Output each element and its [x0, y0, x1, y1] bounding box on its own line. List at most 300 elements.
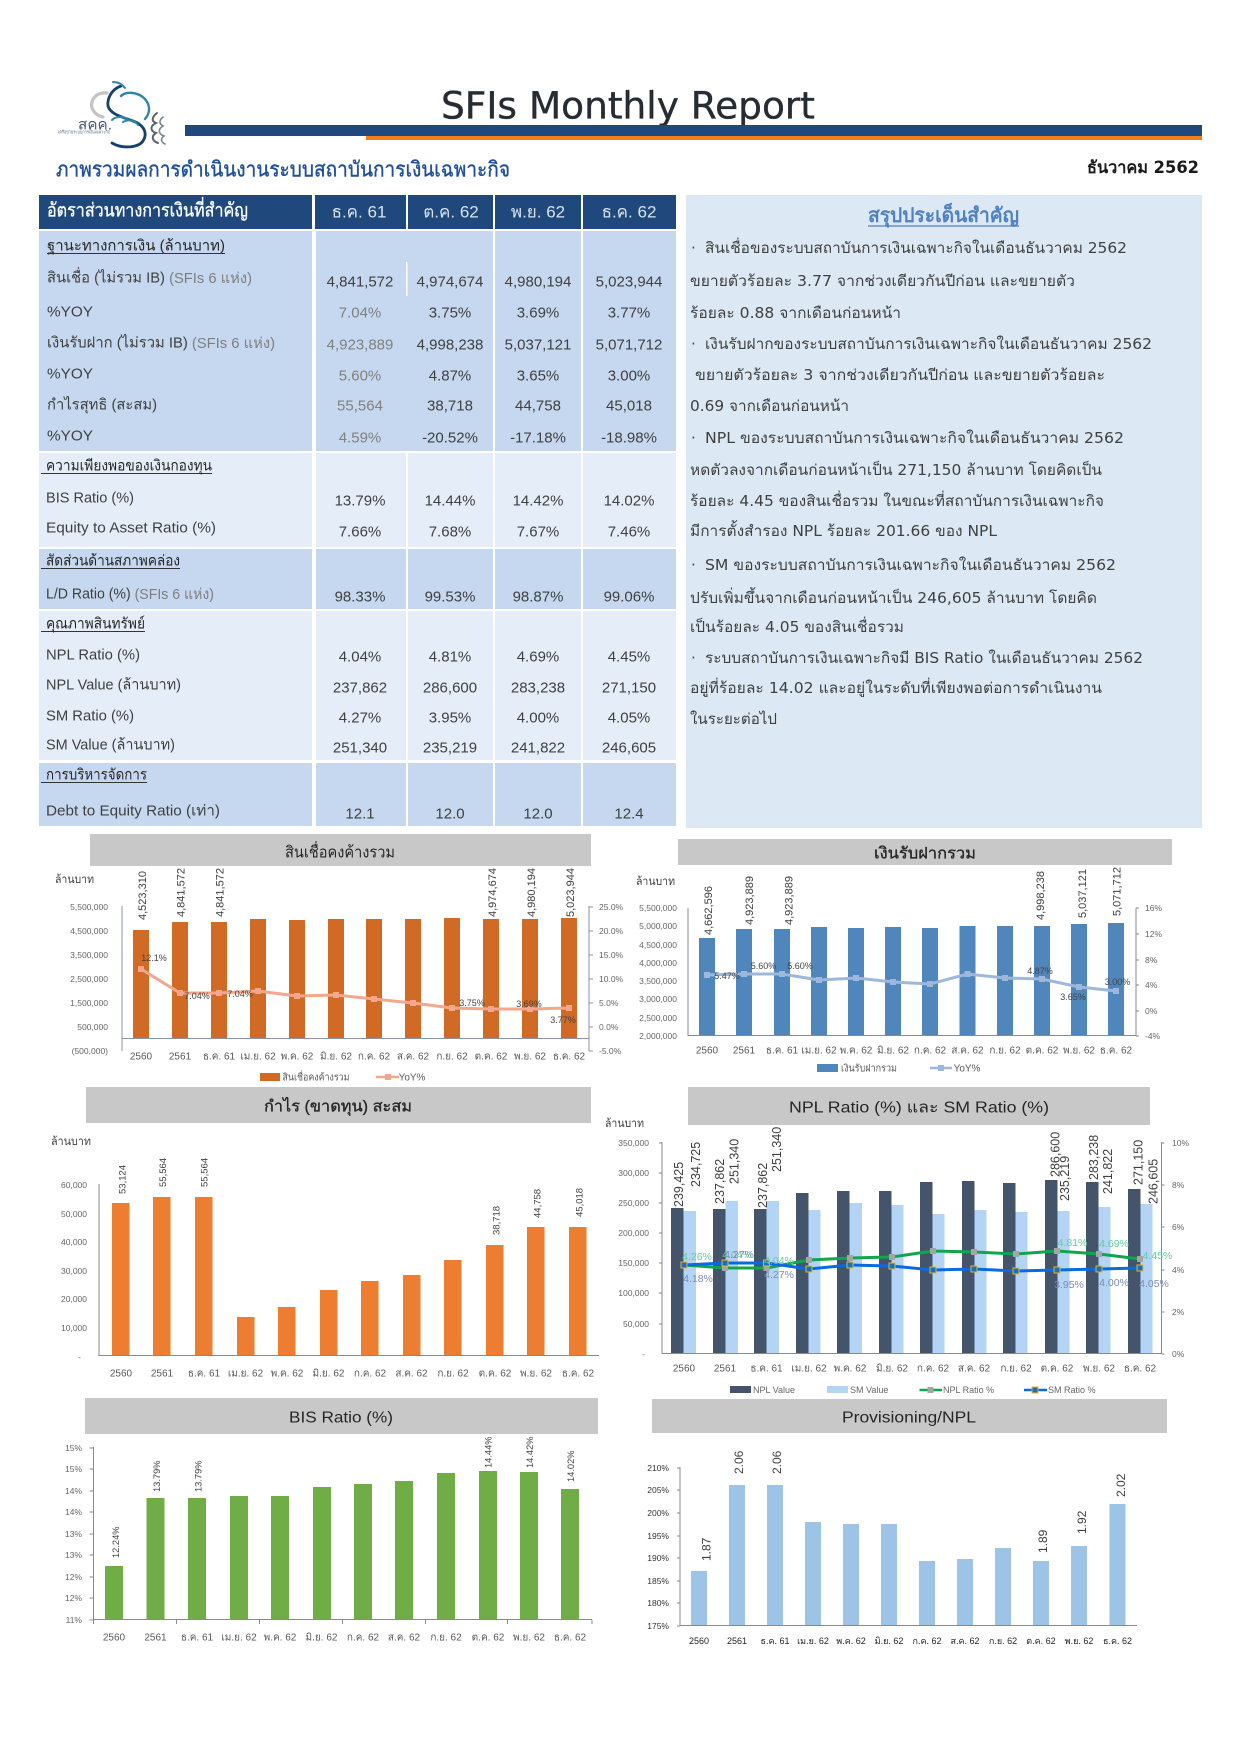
- summary text: อยู่ที่ร้อยละ 14.02 และอยู่ในระดับที่เพียงพอต่อการดำเนินงาน: [690, 677, 1102, 697]
- table section: financial position: 38,718: [427, 398, 473, 414]
- table section: asset quality: NPL Value (ล้านบาท): [46, 676, 181, 694]
- x axis labels: พ.ย. 62: [513, 1632, 545, 1644]
- table header row: ต.ค. 62: [423, 202, 479, 222]
- x axis labels: ธ.ค. 62: [554, 1632, 587, 1644]
- table section: capital adequacy: 7.68%: [429, 524, 471, 540]
- x axis labels: ธ.ค. 62: [562, 1368, 595, 1380]
- panel: outstanding loans chart: สินเชื่อคงค้างรวม: [285, 840, 395, 862]
- rotated value labels: 53,124: [118, 1165, 128, 1194]
- panel: accumulated profit chart: ล้านบาท: [51, 1135, 91, 1148]
- icon: SFIs logo: สคค.: [78, 116, 112, 134]
- x axis labels: เม.ย. 62: [228, 1368, 264, 1380]
- table section: financial position: 3.00%: [608, 368, 650, 384]
- rotated value labels: 5,071,712: [1112, 867, 1124, 916]
- table section: asset quality: 4.81%: [429, 648, 471, 666]
- axes: 0%: [1145, 1006, 1158, 1016]
- panel: BIS ratio chart: BIS Ratio (%): [289, 1410, 393, 1426]
- panel: NPL and SM ratio chart: NPL Ratio (%) และ SM Ratio (%): [789, 1100, 1049, 1116]
- axes: 16%: [1145, 903, 1162, 913]
- axes: 12%: [1145, 929, 1162, 939]
- x axis labels: พ.ค. 62: [840, 1046, 873, 1056]
- line: YoY: 7.04%: [184, 991, 210, 1001]
- rotated value labels: 4,980,194: [526, 868, 538, 917]
- table section: liquidity: 99.53%: [425, 588, 475, 606]
- rotated value labels: 237,862: [756, 1163, 770, 1208]
- x axis labels: ก.ย. 62: [430, 1632, 462, 1644]
- table header row: พ.ย. 62: [511, 202, 565, 222]
- axes: 5.0%: [599, 998, 619, 1008]
- axes: 4,500,000: [70, 926, 108, 936]
- table section: capital adequacy: [39, 453, 676, 547]
- rotated value labels: 271,150: [1132, 1140, 1146, 1185]
- report date: ธันวาคม 2562: [1087, 158, 1199, 178]
- summary text: ระบบสถาบันการเงินเฉพาะกิจมี BIS Ratio ในเดือนธันวาคม 2562: [705, 649, 1143, 667]
- summary text: เป็นร้อยละ 4.05 ของสินเชื่อรวม: [690, 616, 904, 636]
- rotated value labels: 2.06: [770, 1450, 784, 1474]
- rotated value labels: 4,923,889: [744, 876, 756, 925]
- axes: -: [642, 1349, 645, 1359]
- rotated value labels: 239,425: [672, 1162, 686, 1207]
- axes: 50,000: [623, 1319, 649, 1329]
- axes: 15%: [65, 1464, 82, 1474]
- x axis labels: 2561: [144, 1632, 167, 1644]
- rotated value labels: 4,974,674: [487, 868, 499, 917]
- table section: financial position: เงินรับฝาก (ไม่รวม IB) (SFIs 6 แห่ง): [47, 334, 275, 352]
- line: YoY: 5.60%: [787, 961, 813, 971]
- panel: provisioning to NPL chart: Provisioning/NPL: [842, 1410, 976, 1426]
- ratio data labels: 4.27%: [764, 1269, 794, 1281]
- table section: financial position: 5.60%: [339, 368, 381, 384]
- table section: financial position: กำไรสุทธิ (สะสม): [47, 396, 157, 414]
- rotated value labels: 234,725: [689, 1142, 703, 1187]
- x axis labels: ต.ค. 62: [475, 1052, 508, 1062]
- x axis labels: ธ.ค. 61: [750, 1364, 783, 1374]
- table section: asset quality: [39, 611, 676, 760]
- axes: 10.0%: [599, 974, 624, 984]
- x axis labels: ธ.ค. 62: [1100, 1046, 1133, 1056]
- x axis labels: พ.ย. 62: [520, 1368, 552, 1380]
- bars: NPL value: [671, 1180, 1140, 1353]
- line: YoY: 3.75%: [459, 998, 485, 1008]
- summary text: ·: [691, 429, 696, 447]
- table section: asset quality: 4.45%: [608, 648, 650, 666]
- table section: asset quality: 3.95%: [429, 710, 471, 726]
- legend: SM Ratio %: [1048, 1385, 1096, 1395]
- table section: liquidity: [39, 549, 676, 609]
- ratio data labels: 4.81%: [1058, 1237, 1087, 1249]
- rotated value labels: 251,340: [728, 1139, 742, 1184]
- axes: 13%: [65, 1529, 82, 1539]
- x axis labels: พ.ค. 62: [281, 1052, 314, 1062]
- table section: management: [39, 763, 676, 826]
- bars: deposits: [699, 923, 1124, 1035]
- panel: NPL and SM ratio chart: [605, 1087, 1189, 1395]
- x axis labels: ส.ค. 62: [395, 1368, 428, 1380]
- header bar: [185, 125, 1202, 140]
- x axis labels: เม.ย. 62: [221, 1632, 257, 1644]
- axes: [647, 1463, 1137, 1631]
- table section: financial position: 3.65%: [517, 368, 559, 384]
- x axis labels: มิ.ย. 62: [306, 1632, 338, 1644]
- axes: 350,000: [618, 1138, 649, 1148]
- panel: total deposits chart: ล้านบาท: [636, 875, 675, 888]
- x axis labels: มิ.ย. 62: [877, 1046, 909, 1056]
- table section: financial position: -17.18%: [510, 430, 566, 446]
- x axis labels: [696, 1046, 1133, 1056]
- legend: YoY%: [399, 1072, 426, 1084]
- table section: financial position: สินเชื่อ (ไม่รวม IB) (SFIs 6 แห่ง): [47, 266, 252, 286]
- rotated value labels: 13.79%: [194, 1460, 204, 1492]
- x axis labels: พ.ย. 62: [1063, 1046, 1095, 1056]
- x axis labels: ต.ค. 62: [1026, 1046, 1059, 1056]
- line: YoY: 3.69%: [516, 999, 542, 1009]
- axes: 14%: [65, 1507, 82, 1517]
- table section: management: 12.4: [614, 806, 644, 822]
- x axis labels: ธ.ค. 62: [1124, 1364, 1157, 1374]
- x axis labels: ส.ค. 62: [950, 1636, 980, 1646]
- axes: 25.0%: [599, 902, 624, 912]
- table section: financial position: -20.52%: [422, 430, 478, 446]
- axes: 500,000: [77, 1022, 108, 1032]
- axes: 20,000: [61, 1294, 87, 1304]
- axes: 2%: [1172, 1307, 1185, 1317]
- x axis labels: ต.ค. 62: [472, 1632, 505, 1644]
- rotated value labels: 4,523,310: [137, 871, 149, 920]
- x axis labels: เม.ย. 62: [801, 1046, 837, 1056]
- panel: outstanding loans chart: [55, 834, 624, 1084]
- axes: 5,000,000: [639, 921, 677, 931]
- table section: financial position: 4,974,674: [417, 274, 483, 290]
- table header row: อัตราส่วนทางการเงินที่สำคัญ: [47, 196, 248, 222]
- x axis labels: พ.ค. 62: [264, 1632, 297, 1644]
- table section: capital adequacy: 7.66%: [339, 524, 381, 540]
- bars: provisioning: [691, 1485, 1126, 1625]
- axes: 2,500,000: [639, 1013, 677, 1023]
- legend: YoY%: [954, 1064, 981, 1074]
- rotated value labels: [703, 867, 1124, 935]
- x axis labels: ก.ค. 62: [913, 1636, 941, 1646]
- x axis labels: ส.ค. 62: [388, 1632, 421, 1644]
- summary text: หดตัวลงจากเดือนก่อนหน้าเป็น 271,150 ล้านบาท โดยคิดเป็น: [690, 460, 1102, 479]
- axes: 12%: [65, 1572, 82, 1582]
- rotated value labels: 55,564: [200, 1158, 210, 1187]
- axes: 250,000: [618, 1198, 649, 1208]
- ratio data labels: 4.00%: [1099, 1277, 1129, 1289]
- table section: financial position: 5,037,121: [505, 336, 571, 354]
- table section: asset quality: 286,600: [423, 680, 477, 696]
- rotated value labels: 14.44%: [484, 1436, 494, 1468]
- x axis labels: พ.ค. 62: [271, 1368, 304, 1380]
- x axis labels: ธ.ค. 61: [766, 1046, 799, 1056]
- line: YoY: 5.47%: [714, 971, 740, 981]
- summary text: [690, 237, 1152, 728]
- line: YoY: [704, 961, 1130, 1002]
- x axis labels: ธ.ค. 62: [553, 1052, 586, 1062]
- x axis labels: 2560: [673, 1364, 696, 1374]
- x axis labels: 2560: [689, 1636, 709, 1646]
- rotated value labels: 237,862: [713, 1159, 727, 1204]
- x axis labels: ก.ย. 62: [436, 1052, 468, 1062]
- table section: financial position: 3.69%: [517, 304, 559, 322]
- x axis labels: เม.ย. 62: [240, 1052, 276, 1062]
- x axis labels: เม.ย. 62: [791, 1364, 827, 1374]
- table section: asset quality: 251,340: [333, 740, 387, 756]
- table section: financial position: 7.04%: [339, 304, 381, 322]
- ratio data labels: 4.18%: [683, 1273, 713, 1285]
- table section: asset quality: 4.00%: [517, 710, 559, 726]
- x axis labels: มิ.ย. 62: [313, 1368, 345, 1380]
- x axis labels: ต.ค. 62: [1041, 1364, 1074, 1374]
- table section: capital adequacy: Equity to Asset Ratio (%): [46, 520, 216, 536]
- table section: asset quality: 271,150: [602, 680, 656, 696]
- rotated value labels: 44,758: [532, 1189, 544, 1218]
- x axis labels: พ.ค. 62: [834, 1364, 867, 1374]
- table section: financial position: 5,071,712: [596, 336, 662, 354]
- summary text: ·: [691, 556, 696, 574]
- table section: capital adequacy: 7.67%: [517, 524, 559, 540]
- rotated value labels: 14.42%: [525, 1436, 535, 1468]
- panel: financial ratios table: [39, 195, 676, 826]
- icon: SFIs logo: เครือข่ายระบบการเงินเฉพาะกิจ: [58, 128, 110, 134]
- rotated value labels: 286,600: [1048, 1132, 1062, 1177]
- axes: 175%: [647, 1621, 669, 1631]
- table section: financial position: 55,564: [337, 398, 383, 414]
- panel: total deposits chart: เงินรับฝากรวม: [874, 846, 976, 862]
- rotated value labels: 2.06: [732, 1450, 746, 1474]
- ratio data labels: 4.04%: [764, 1255, 794, 1267]
- axes: [639, 903, 1162, 1041]
- axes: 185%: [647, 1576, 669, 1586]
- table header row: [39, 195, 676, 229]
- line: YoY: 12.1%: [141, 953, 167, 963]
- line: YoY: 3.00%: [1105, 977, 1130, 987]
- table section: financial position: 3.77%: [608, 304, 650, 322]
- rotated value labels: 4,841,572: [176, 868, 188, 917]
- x axis labels: ก.ค. 62: [358, 1052, 391, 1062]
- x axis labels: [110, 1368, 595, 1380]
- x axis labels: เม.ย. 62: [797, 1636, 829, 1646]
- table section: capital adequacy: 13.79%: [335, 492, 385, 510]
- table section: financial position: 44,758: [515, 398, 561, 414]
- table section: liquidity: สัดส่วนด้านสภาพคล่อง: [46, 552, 180, 570]
- rotated value labels: 45,018: [574, 1188, 586, 1217]
- legend: [817, 1064, 981, 1074]
- legend: [260, 1070, 426, 1084]
- axes: 12%: [65, 1593, 82, 1603]
- rotated value labels: 5,037,121: [1077, 869, 1089, 918]
- summary text: ·: [691, 239, 696, 257]
- x axis labels: 2560: [110, 1368, 133, 1380]
- x axis labels: พ.ย. 62: [514, 1052, 546, 1062]
- x axis labels: 2561: [714, 1364, 737, 1374]
- legend: สินเชื่อคงค้างรวม: [282, 1070, 350, 1084]
- table section: capital adequacy: 14.42%: [513, 492, 563, 510]
- table section: asset quality: 241,822: [511, 740, 565, 756]
- table section: asset quality: 237,862: [333, 680, 387, 696]
- line: YoY: 5.60%: [751, 961, 776, 971]
- table section: asset quality: 4.04%: [339, 648, 381, 666]
- axes: 0%: [1172, 1349, 1185, 1359]
- legend: เงินรับฝากรวม: [841, 1064, 897, 1074]
- table section: management: 12.1: [345, 806, 375, 822]
- ratio data labels: 4.04%: [722, 1249, 752, 1261]
- rotated value labels: 38,718: [492, 1206, 502, 1235]
- x axis labels: ส.ค. 62: [951, 1046, 984, 1056]
- legend: SM Value: [850, 1385, 888, 1395]
- x axis labels: มิ.ย. 62: [875, 1636, 903, 1646]
- axes: (500,000): [72, 1046, 108, 1056]
- line: YoY: 4.87%: [1027, 966, 1053, 976]
- table section: financial position: 4.87%: [429, 368, 471, 384]
- rotated value labels: 241,822: [1101, 1149, 1115, 1194]
- summary text: 0.69 จากเดือนก่อนหน้า: [690, 397, 849, 415]
- bars: loans: [133, 918, 577, 1038]
- rotated value labels: 1.92: [1075, 1510, 1089, 1534]
- x axis labels: 2560: [696, 1046, 719, 1056]
- axes: 8%: [1172, 1180, 1185, 1190]
- panel: accumulated profit chart: กำไร (ขาดทุน) สะสม: [264, 1096, 412, 1116]
- table section: management: 12.0: [435, 806, 465, 822]
- axes: 20.0%: [599, 926, 624, 936]
- line: YoY: 7.04%: [227, 989, 253, 999]
- x axis labels: ส.ค. 62: [958, 1364, 991, 1374]
- axes: 200,000: [618, 1228, 649, 1238]
- axes: [618, 1138, 1189, 1359]
- axes: 15%: [65, 1443, 82, 1453]
- axes: 4,500,000: [639, 940, 677, 950]
- summary text: SM ของระบบสถาบันการเงินเฉพาะกิจในเดือนธันวาคม 2562: [705, 556, 1116, 574]
- rotated value labels: 5,023,944: [565, 868, 577, 917]
- x axis labels: 2561: [151, 1368, 174, 1380]
- rotated value labels: [137, 868, 577, 920]
- axes: 1,500,000: [70, 998, 108, 1008]
- ratio data labels: 3.95%: [1054, 1279, 1084, 1291]
- legend: NPL Value: [753, 1385, 795, 1395]
- table section: financial position: 4,841,572: [327, 274, 393, 290]
- table section: liquidity: 99.06%: [604, 588, 654, 606]
- x axis labels: [689, 1636, 1132, 1646]
- table section: capital adequacy: ความเพียงพอของเงินกองทุน: [46, 458, 212, 476]
- table section: financial position: 4,998,238: [417, 336, 483, 354]
- table header row: ธ.ค. 61: [332, 202, 386, 222]
- bars: BIS: [105, 1471, 579, 1620]
- x axis labels: ก.ย. 62: [437, 1368, 469, 1380]
- axes: 50,000: [61, 1209, 87, 1219]
- subtitle: ภาพรวมผลการดำเนินงานระบบสถาบันการเงินเฉพาะกิจ: [56, 158, 510, 182]
- axes: 11%: [66, 1615, 82, 1625]
- x axis labels: ก.ค. 62: [347, 1632, 380, 1644]
- x axis labels: 2560: [103, 1632, 126, 1644]
- table section: asset quality: 283,238: [511, 680, 565, 696]
- x axis labels: ก.ย. 62: [1000, 1364, 1032, 1374]
- summary text: NPL ของระบบสถาบันการเงินเฉพาะกิจในเดือนธันวาคม 2562: [705, 429, 1124, 447]
- rotated value labels: 4,841,572: [214, 868, 226, 917]
- rotated value labels: 4,662,596: [703, 886, 715, 935]
- table section: capital adequacy: BIS Ratio (%): [46, 490, 134, 506]
- summary heading: สรุปประเด็นสำคัญ: [868, 202, 1019, 228]
- axes: 4%: [1172, 1265, 1185, 1275]
- legend: NPL Ratio %: [943, 1385, 994, 1395]
- rotated value labels: 2.02: [1114, 1473, 1128, 1497]
- table section: management: Debt to Equity Ratio (เท่า): [46, 802, 220, 820]
- summary text: ในระยะต่อไป: [690, 710, 777, 728]
- axes: [70, 902, 624, 1056]
- axes: 5,500,000: [639, 903, 677, 913]
- x axis labels: พ.ย. 62: [1083, 1364, 1115, 1374]
- axes: 2,000,000: [639, 1031, 677, 1041]
- rotated value labels: 55,564: [158, 1158, 169, 1187]
- ratio data labels: 4.27%: [724, 1249, 754, 1261]
- axes: 2,500,000: [70, 974, 108, 984]
- panel: outstanding loans chart: ล้านบาท: [55, 873, 94, 886]
- x axis labels: 2561: [733, 1046, 756, 1056]
- line: YoY: 3.77%: [550, 1015, 576, 1025]
- table section: financial position: -18.98%: [601, 430, 657, 446]
- axes: -4%: [1145, 1031, 1161, 1041]
- line: YoY: 3.65%: [1060, 992, 1086, 1002]
- ratio data labels: 4.05%: [1139, 1278, 1169, 1290]
- x axis labels: ธ.ค. 62: [1103, 1636, 1132, 1646]
- rotated value labels: 235,219: [1058, 1156, 1072, 1201]
- summary text: สินเชื่อของระบบสถาบันการเงินเฉพาะกิจในเดือนธันวาคม 2562: [705, 237, 1127, 257]
- table section: financial position: %YOY: [47, 428, 93, 444]
- x axis labels: ต.ค. 62: [1026, 1636, 1056, 1646]
- rotated value labels: [672, 1127, 1160, 1208]
- table section: asset quality: SM Ratio (%): [46, 708, 134, 724]
- table section: asset quality: NPL Ratio (%): [46, 646, 140, 664]
- x axis labels: ก.ย. 62: [989, 1046, 1021, 1056]
- rotated value labels: 4,998,238: [1035, 871, 1047, 920]
- x axis labels: ธ.ค. 61: [188, 1368, 221, 1380]
- axes: 10%: [1172, 1138, 1189, 1148]
- x axis labels: ส.ค. 62: [397, 1052, 430, 1062]
- rotated value labels: [111, 1436, 576, 1558]
- table section: financial position: ฐานะทางการเงิน (ล้านบาท): [47, 238, 225, 254]
- table section: capital adequacy: 7.46%: [608, 524, 650, 540]
- bars: SM value: [684, 1201, 1152, 1353]
- axes: 195%: [647, 1531, 669, 1541]
- axes: 205%: [647, 1485, 669, 1495]
- axes: 190%: [647, 1553, 669, 1563]
- summary text: ขยายตัวร้อยละ 3 จากช่วงเดียวกันปีก่อน และขยายตัวร้อยละ: [695, 366, 1105, 384]
- x axis labels: มิ.ย. 62: [876, 1364, 908, 1374]
- axes: 150,000: [618, 1258, 649, 1268]
- summary text: ·: [691, 335, 696, 353]
- axes: 4%: [1145, 980, 1158, 990]
- line: SM ratio: [681, 1260, 1143, 1274]
- panel: BIS ratio chart: [65, 1398, 598, 1644]
- line: YoY: [138, 953, 576, 1025]
- axes: 5,500,000: [70, 902, 108, 912]
- x axis labels: มิ.ย. 62: [320, 1052, 352, 1062]
- table section: financial position: %YOY: [47, 304, 93, 320]
- table section: liquidity: L/D Ratio (%) (SFIs 6 แห่ง): [46, 586, 214, 602]
- x axis labels: 2560: [130, 1052, 153, 1062]
- axes: 14%: [65, 1486, 82, 1496]
- axes: 200%: [647, 1508, 669, 1518]
- table section: management: 12.0: [523, 806, 553, 822]
- axes: -5.0%: [599, 1046, 622, 1056]
- rotated value labels: 1.89: [1036, 1529, 1050, 1553]
- axes: [61, 1180, 599, 1362]
- axes: 3,500,000: [639, 976, 677, 986]
- table section: financial position: 4,923,889: [327, 336, 393, 354]
- panel: key summary: [686, 195, 1202, 828]
- rotated value labels: 251,340: [770, 1127, 784, 1172]
- summary text: ร้อยละ 0.88 จากเดือนก่อนหน้า: [690, 304, 901, 322]
- table section: asset quality: 246,605: [602, 740, 656, 756]
- rotated value labels: 1.87: [700, 1537, 714, 1561]
